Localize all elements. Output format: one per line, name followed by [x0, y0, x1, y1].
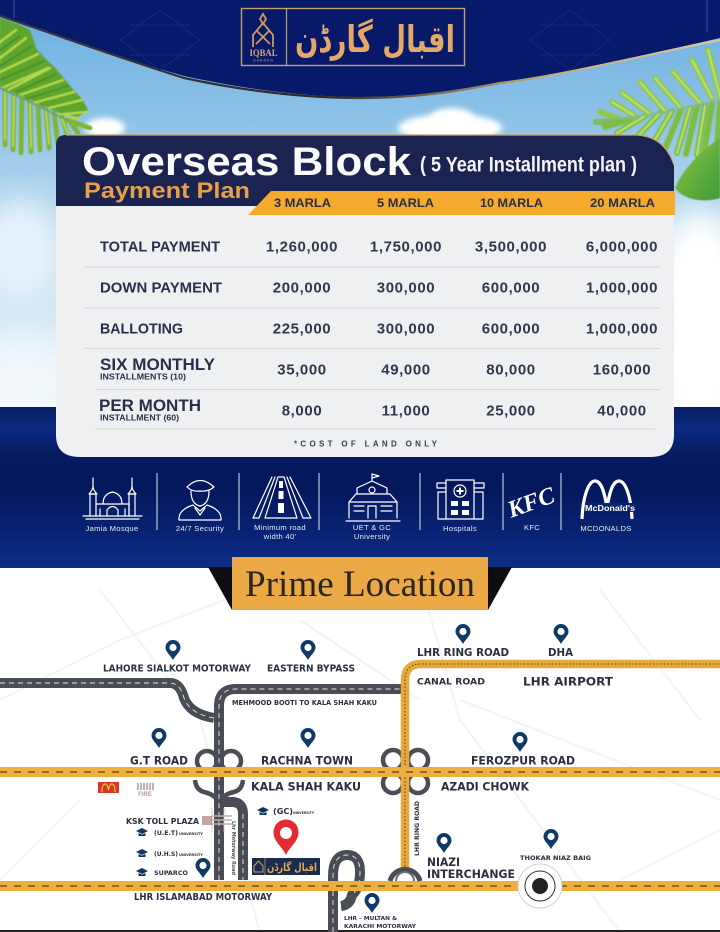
map labels: INTERCHANGE [427, 867, 515, 881]
row: total payment: 1,260,000 [266, 238, 338, 256]
navy lower band [0, 407, 720, 568]
row: total payment: 1,750,000 [370, 238, 442, 256]
row: down payment: 200,000 [273, 280, 331, 296]
map labels: LHR AIRPORT [523, 674, 613, 688]
row: per month: PER MONTH [99, 396, 201, 415]
row: balloting: BALLOTING [100, 320, 183, 338]
card header: ( 5 Year Installment plan ) [420, 154, 637, 176]
row: balloting: 1,000,000 [586, 320, 658, 338]
card header: Overseas Block [82, 140, 412, 184]
row: six monthly: INSTALLMENTS (10) [100, 372, 186, 382]
yellow highways [0, 664, 720, 886]
grey roads [0, 683, 428, 932]
row: per month: 8,000 [282, 402, 322, 420]
row: six monthly: SIX MONTHLY [100, 355, 216, 374]
row: per month [99, 396, 647, 422]
map labels [103, 647, 613, 930]
map labels: NIAZI [427, 855, 460, 869]
palm frond right [595, 50, 720, 200]
row: six monthly: 160,000 [593, 362, 651, 378]
map labels: LHR RING ROAD [414, 801, 421, 856]
logo: Iqbal Garden: GARDEN [253, 58, 274, 62]
column header strip: 5 MARLA [377, 196, 434, 210]
card header: Payment Plan [84, 178, 250, 203]
map labels: KARACHI MOTORWAY [344, 924, 417, 930]
icon: McDonald's [580, 481, 636, 533]
icon: hospital [437, 480, 484, 533]
column header strip: 3 MARLA [274, 196, 331, 210]
row: total payment: 6,000,000 [586, 238, 658, 256]
map labels: FEROZPUR ROAD [471, 754, 575, 768]
map labels: UNIVERSITY [293, 811, 314, 815]
university markers [136, 807, 269, 876]
row: down payment [100, 280, 658, 296]
card header [56, 135, 674, 206]
map labels: UNIVERSITY [179, 832, 203, 836]
icon: jamia mosque: Jamia Mosque [86, 524, 138, 533]
roundabout: Thokar Niaz Baig [518, 864, 562, 908]
prime location heading [208, 557, 512, 610]
row: per month: INSTALLMENT (60) [100, 412, 179, 422]
McDonald's marker [98, 782, 119, 793]
map labels: CANAL ROAD [417, 678, 485, 688]
row: total payment: TOTAL PAYMENT [100, 238, 220, 256]
row: down payment: 600,000 [482, 280, 540, 296]
map labels: KALA SHAH KAKU [251, 780, 361, 794]
map labels: G.T ROAD [130, 754, 188, 768]
row: total payment: 3,500,000 [475, 238, 547, 256]
icon: road: Minimum road [254, 523, 306, 532]
map labels: UNIVERSITY [179, 853, 203, 857]
row: per month: 25,000 [486, 402, 536, 420]
row: per month: 40,000 [597, 402, 647, 420]
map labels: (U.H.S) [154, 850, 178, 858]
map labels: (GC) [273, 807, 293, 816]
small project logo: اقبال گارڈن [267, 861, 317, 874]
palm frond left [0, 18, 90, 153]
map labels: SUPARCO [154, 869, 188, 877]
sky background [0, 0, 720, 430]
row: down payment: 1,000,000 [586, 280, 658, 296]
location pins [152, 624, 568, 913]
logo: Iqbal Garden: اقبال گارڈن [295, 18, 455, 61]
map labels: EASTERN BYPASS [267, 664, 355, 674]
icon: road [253, 477, 311, 541]
icon: university building [346, 474, 400, 541]
row: down payment: 300,000 [377, 280, 435, 296]
map labels: (U.E.T) [154, 829, 178, 837]
toll plaza [203, 808, 232, 832]
row: six monthly [100, 355, 651, 382]
logo: Iqbal Garden [242, 8, 464, 66]
icon: security guard: 24/7 Security [176, 524, 224, 533]
panel: payment plan card [56, 135, 675, 457]
icon: university building: UET & GC [353, 523, 391, 532]
small project logo [252, 858, 320, 875]
map labels: RACHNA TOWN [261, 754, 353, 768]
map labels: THOKAR NIAZ BAIG [520, 854, 591, 862]
icon: KFC: KFC [524, 523, 540, 532]
map labels: Lhr Motorway Road [230, 821, 236, 875]
icon: security guard [176, 480, 224, 533]
column header strip: 10 MARLA [480, 196, 543, 210]
map labels: MEHMOOD BOOTI TO KALA SHAH KAKU [232, 699, 377, 707]
map labels: LAHORE SIALKOT MOTORWAY [103, 664, 252, 674]
map labels: LHR – MULTAN & [344, 916, 397, 922]
row: total payment [100, 238, 658, 256]
row: six monthly: 49,000 [381, 362, 431, 378]
icon: university building: University [354, 532, 390, 541]
row: balloting: 600,000 [482, 320, 540, 338]
row: six monthly: 80,000 [486, 362, 536, 378]
fire station marker: FIRE [138, 792, 152, 798]
project location red pin [274, 820, 298, 855]
icon: jamia mosque [83, 478, 142, 533]
icon: McDonald's: McDonald's [585, 504, 636, 513]
map labels: KSK TOLL PLAZA [126, 817, 200, 826]
map labels: DHA [548, 647, 574, 659]
logo: Iqbal Garden: IQBAL [250, 48, 278, 58]
row: balloting: 225,000 [273, 320, 331, 338]
map labels: LHR ISLAMABAD MOTORWAY [134, 892, 273, 903]
row: down payment: DOWN PAYMENT [100, 280, 222, 296]
footnote: *COST OF LAND ONLY [294, 440, 438, 448]
map labels: LHR RING ROAD [417, 647, 509, 659]
row: six monthly: 35,000 [277, 362, 327, 378]
icon: McDonald's: MCDONALDS [580, 524, 632, 533]
navy header banner [0, 0, 720, 98]
row: balloting: 300,000 [377, 320, 435, 338]
map labels: AZADI CHOWK [441, 780, 530, 794]
icon: KFC: KFC [503, 482, 559, 524]
row: per month: 11,000 [382, 402, 430, 420]
row: balloting [100, 320, 658, 338]
icon: road: width 40' [263, 532, 296, 541]
map background [0, 568, 720, 932]
prime location heading: Prime Location [245, 564, 475, 605]
column header strip: 20 MARLA [590, 196, 655, 210]
column header strip [248, 191, 675, 215]
fire station marker [138, 783, 153, 798]
niazi interchange arch [390, 869, 420, 881]
icon: hospital: Hospitals [443, 524, 477, 533]
